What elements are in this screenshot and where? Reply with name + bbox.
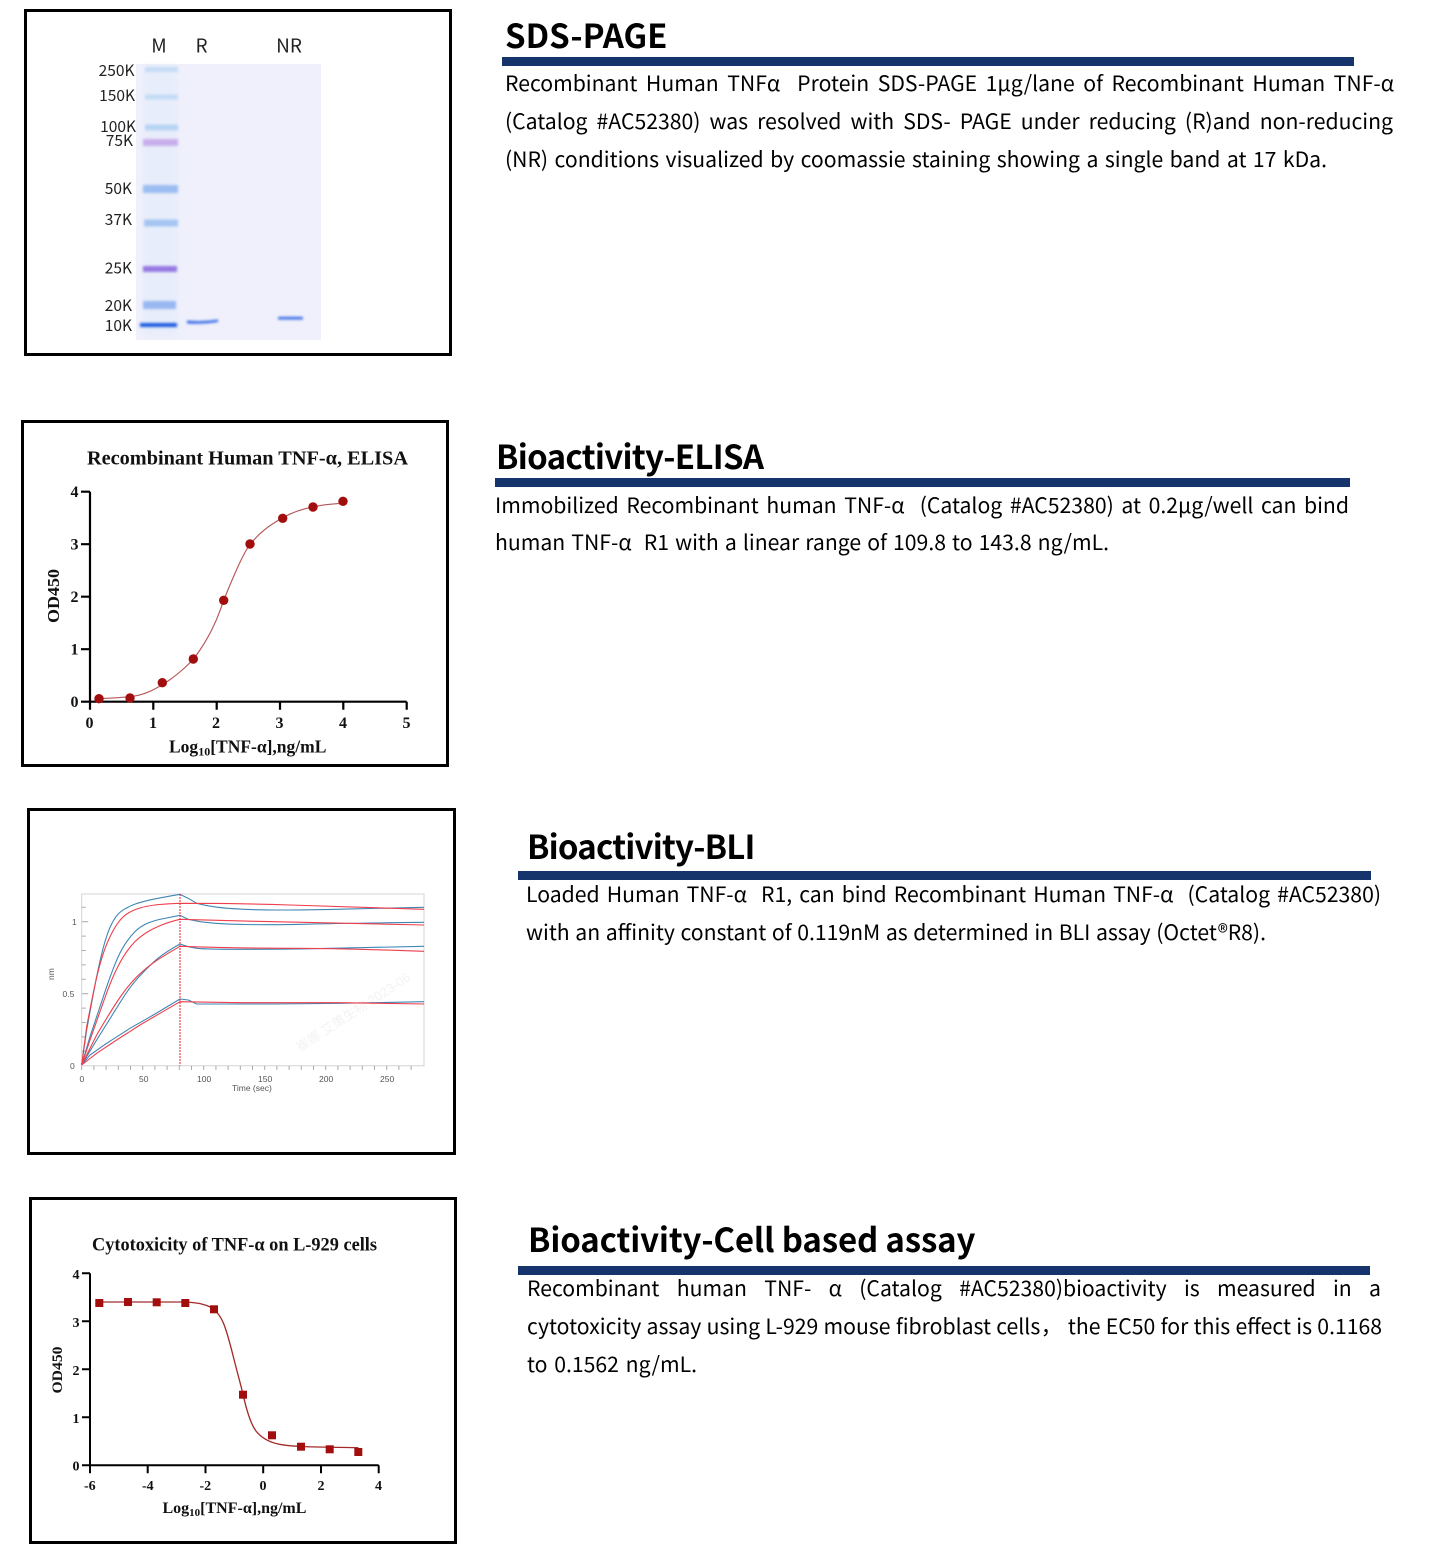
panel: cytotoxicity chart (29, 1197, 457, 1544)
axis tick labels: 0 (70, 694, 78, 711)
heading: Bioactivity-BLI: Bioactivity-BLI (527, 821, 755, 869)
x axis label: [TNF-α],ng/mL (210, 736, 326, 756)
text block: SDS-PAGE description: Recombinant Human TNFα Protein SDS-PAGE 1μg/lane of Recombinant Human TNF-α (505, 67, 1394, 98)
divider bar: ELISA (495, 478, 1350, 487)
panel: ELISA chart (21, 420, 449, 767)
axis tick labels: 3 (72, 1316, 80, 1331)
x axis label: 10 (198, 744, 210, 758)
x axis label: Log (162, 1500, 189, 1517)
axis tick labels: 2 (212, 715, 220, 732)
axis tick labels (70, 484, 410, 732)
axis tick labels: 2 (318, 1479, 324, 1494)
axis labels: nm (46, 968, 56, 980)
axis labels: 0.5 (62, 989, 75, 999)
response curves (82, 894, 424, 1066)
axis tick labels: -4 (142, 1479, 154, 1494)
divider bar: cell based assay (518, 1266, 1370, 1275)
axis tick labels: 1 (72, 1412, 80, 1427)
molecular weight labels: 37K (105, 208, 132, 230)
axis tick labels: 0 (72, 1460, 80, 1474)
molecular weight labels: 75K (106, 129, 133, 151)
fitted curves (red) (82, 903, 424, 1065)
molecular weight labels (99, 59, 136, 336)
axis tick labels: 3 (276, 715, 284, 732)
heading: Bioactivity-Cell based assay: Bioactivity-Cell based assay (528, 1214, 975, 1262)
axis labels: 0 (80, 1074, 84, 1084)
axis tick labels: 0 (260, 1479, 266, 1494)
axis labels: 100 (197, 1074, 211, 1084)
fitted curve (99, 503, 343, 699)
text block: ELISA description: human TNF-α R1 with a linear range of 109.8 to 143.8 ng/mL. (495, 526, 1109, 557)
gel background (136, 64, 321, 340)
axes (81, 492, 407, 710)
association/dissociation marker (178, 894, 181, 1066)
axis tick labels: 5 (402, 715, 410, 732)
molecular weight labels: 10K (105, 314, 132, 336)
axis tick labels: 3 (70, 536, 78, 554)
axis labels: 250 (380, 1074, 394, 1084)
text block: cell based assay description: to 0.1562 ng/mL. (527, 1348, 697, 1379)
lane labels: M (151, 32, 167, 58)
axis tick labels: -2 (200, 1479, 211, 1494)
axis tick labels: 4 (375, 1479, 382, 1494)
text block: SDS-PAGE description (505, 67, 1394, 174)
panel: SDS-PAGE gel image (24, 9, 452, 356)
axis tick labels: 1 (149, 715, 157, 732)
divider bar: BLI (518, 871, 1371, 880)
text block: SDS-PAGE description: (Catalog #AC52380) was resolved with SDS- PAGE under reducing (R)and non-reducing (505, 105, 1393, 136)
x axis label: [TNF-α],ng/mL (200, 1500, 306, 1517)
molecular weight labels: 250K (99, 59, 134, 81)
axis labels: 150 (258, 1074, 272, 1084)
x axis label: 10 (189, 1507, 201, 1519)
measured curves (blue) (82, 894, 424, 1065)
sample band R (187, 320, 218, 324)
molecular weight labels: 50K (105, 177, 132, 199)
molecular weight labels: 100K (100, 115, 136, 137)
axis labels: Time (sec) (232, 1083, 272, 1093)
y axis label: OD450 (44, 569, 63, 623)
lane labels: R (195, 32, 208, 58)
axes (82, 1273, 379, 1473)
axis tick labels: 2 (70, 589, 78, 606)
divider bar: SDS-PAGE (502, 57, 1354, 66)
marker lane bands (140, 67, 178, 327)
axis tick labels: 0 (86, 715, 94, 732)
data points (94, 497, 348, 703)
axis labels (46, 917, 394, 1093)
fitted curve (99, 1302, 358, 1448)
axis labels: 1 (72, 917, 77, 927)
text block: BLI description: with an affinity constant of 0.119nM as determined in BLI assay (Octet®R8). (526, 916, 1266, 947)
axis tick labels: 4 (72, 1268, 80, 1283)
text block: SDS-PAGE description: (NR) conditions visualized by coomassie staining showing a single band at 17 kDa. (505, 143, 1327, 174)
axis labels: 200 (319, 1074, 333, 1084)
axis tick labels: -6 (84, 1479, 96, 1494)
heading: Bioactivity-ELISA: Bioactivity-ELISA (496, 431, 763, 479)
axis tick labels: 4 (339, 715, 347, 732)
molecular weight labels: 150K (99, 84, 135, 106)
heading: SDS-PAGE: SDS-PAGE (505, 10, 667, 58)
molecular weight labels: 25K (105, 256, 132, 278)
chart title: Cytotoxicity of TNF-α on L-929 cells (92, 1236, 377, 1256)
lane labels: NR (276, 32, 302, 58)
axis labels: 0 (70, 1061, 75, 1071)
data points (95, 1298, 362, 1456)
text block: BLI description (526, 878, 1381, 947)
lane labels (151, 32, 302, 58)
watermark: 崔娜 艾策生物 2023-06 (293, 970, 413, 1055)
text block: cell based assay description (527, 1272, 1382, 1379)
axis ticks (82, 907, 411, 1070)
text block: BLI description: Loaded Human TNF-α R1, can bind Recombinant Human TNF-α (Catalog #AC52380) (526, 878, 1381, 909)
text block: ELISA description: Immobilized Recombinant human TNF-α (Catalog #AC52380) at 0.2μg/well can bind (495, 489, 1349, 520)
axis tick labels: 1 (70, 642, 78, 658)
axis labels: 50 (139, 1074, 149, 1084)
sample band NR (278, 317, 303, 320)
text block: cell based assay description: Recombinant human TNF- α (Catalog #AC52380)bioactivity is measured in a (527, 1272, 1381, 1303)
y axis label: OD450 (50, 1346, 66, 1394)
text block: ELISA description (495, 489, 1349, 557)
chart title: Recombinant Human TNF-α, ELISA (87, 448, 408, 470)
text block: cell based assay description: cytotoxicity assay using L-929 mouse fibroblast cells， the EC50 for this effect is 0.1168 (527, 1310, 1382, 1341)
plot frame (82, 894, 424, 1066)
x axis label: Log (169, 736, 198, 756)
axis tick labels: 4 (70, 484, 78, 501)
molecular weight labels: 20K (105, 294, 132, 316)
axis tick labels: 2 (72, 1364, 80, 1379)
axis tick labels (72, 1268, 382, 1494)
panel: BLI sensorgram (27, 808, 456, 1155)
